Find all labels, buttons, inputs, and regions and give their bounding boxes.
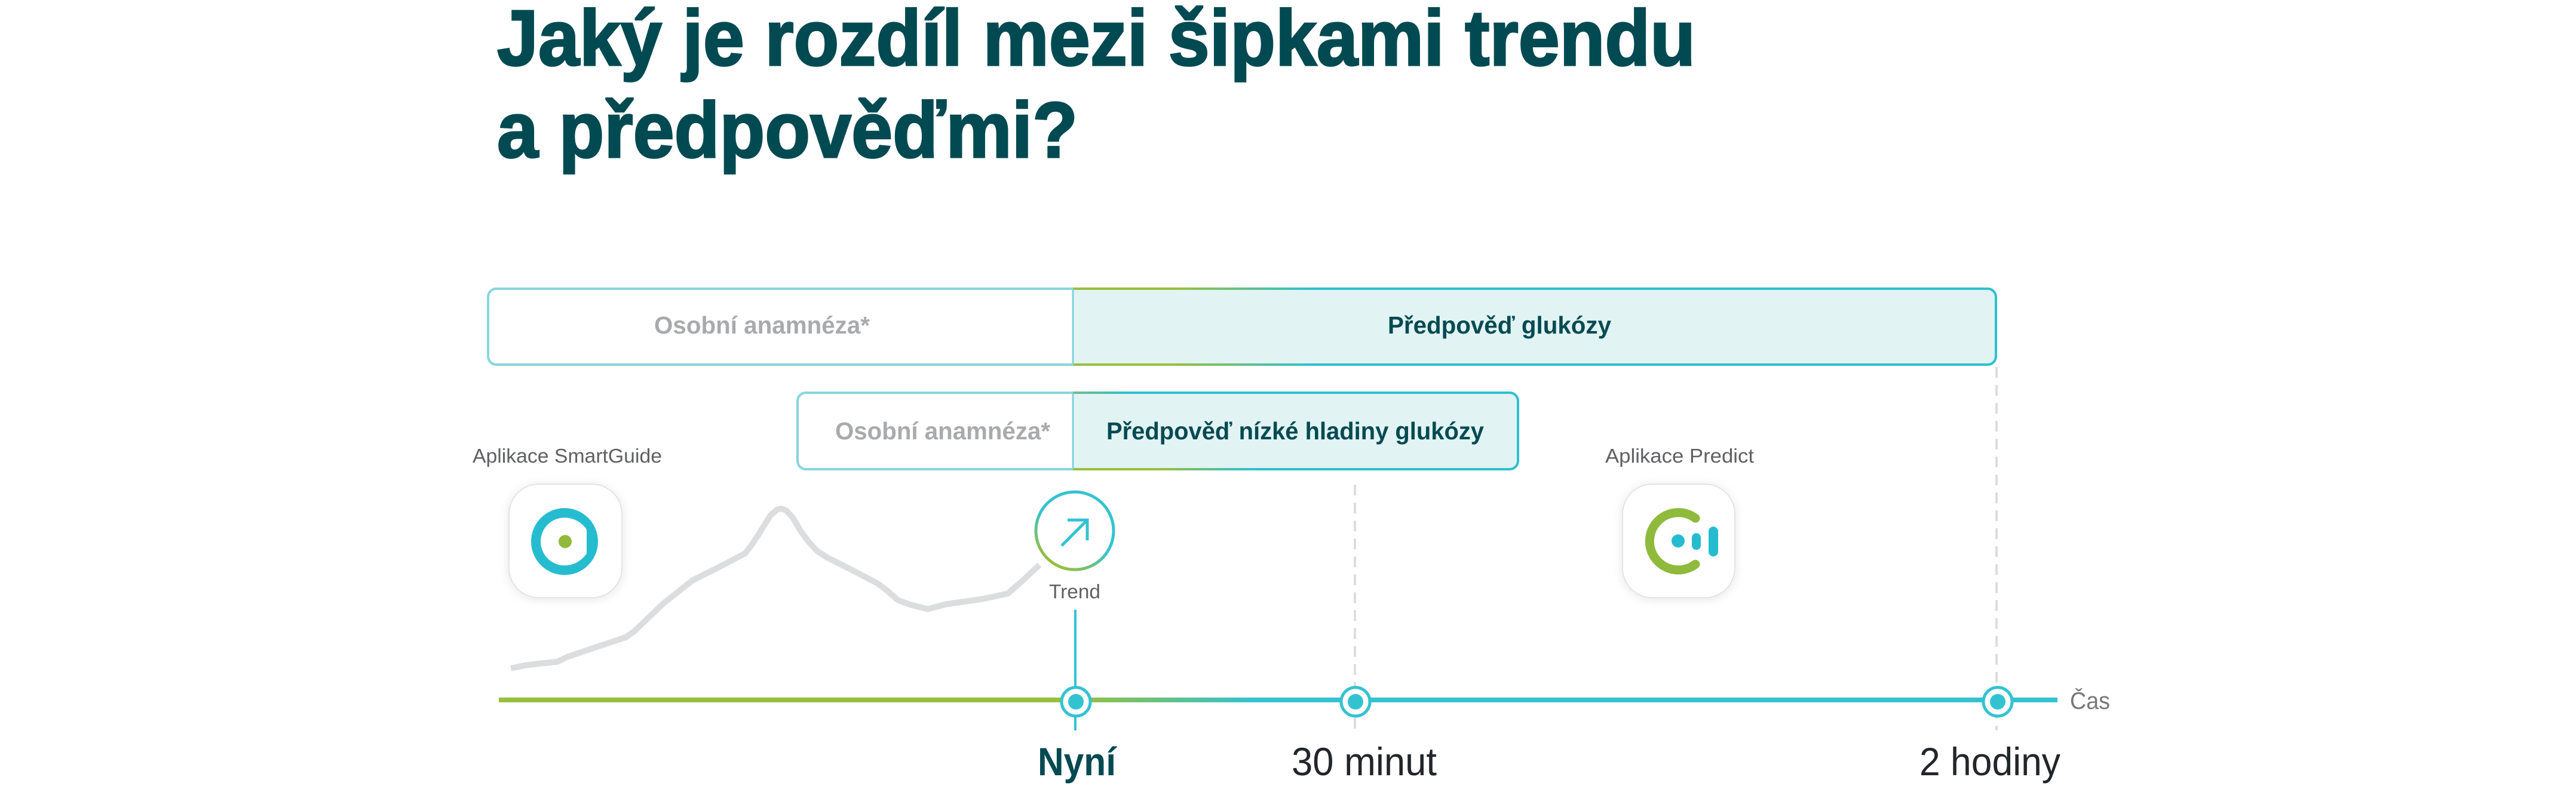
- low glucose forecast segment: [1073, 393, 1518, 469]
- dashed guide: 2 hours: [1995, 367, 1998, 730]
- marker: now: [1062, 687, 1090, 716]
- personal history segment, lower bar: [798, 393, 1073, 469]
- timeline axis: [499, 687, 2057, 716]
- label: SmartGuide app: Aplikace SmartGuide: [473, 445, 662, 467]
- label: Predict app: Aplikace Predict: [1605, 445, 1754, 467]
- icon: trend arrow in circle: [1036, 492, 1114, 570]
- personal history segment, lower bar: Osobní anamnéza*: [835, 417, 1050, 445]
- label: now: Nyní: [1038, 739, 1117, 784]
- glucose forecast segment: [1073, 289, 1996, 365]
- marker: 2 hours: [1983, 687, 2012, 716]
- dashed guide: 30 minutes: [1354, 485, 1356, 730]
- label: 2 hours: 2 hodiny: [1919, 739, 2060, 784]
- title: [497, 0, 1695, 174]
- personal history segment, upper bar: [488, 289, 1073, 365]
- low glucose forecast segment: Předpověď nízké hladiny glukózy: [1106, 417, 1484, 445]
- now marker stem: [1074, 610, 1077, 730]
- icon: SmartGuide app: [509, 484, 622, 598]
- glucose history curve: [511, 509, 1039, 668]
- panel: glucose forecast bar: [488, 289, 1996, 365]
- panel: low glucose forecast bar: [798, 393, 1518, 469]
- personal history segment, upper bar: Osobní anamnéza*: [654, 311, 870, 339]
- label: trend: Trend: [1049, 580, 1100, 603]
- glucose forecast segment: Předpověď glukózy: [1388, 311, 1611, 339]
- marker: 30 minutes: [1341, 687, 1370, 716]
- label: 30 minutes: 30 minut: [1292, 739, 1437, 784]
- icon: Predict app: [1623, 484, 1735, 598]
- label: time axis: Čas: [2070, 687, 2110, 714]
- title: a předpověďmi?: [497, 86, 1078, 174]
